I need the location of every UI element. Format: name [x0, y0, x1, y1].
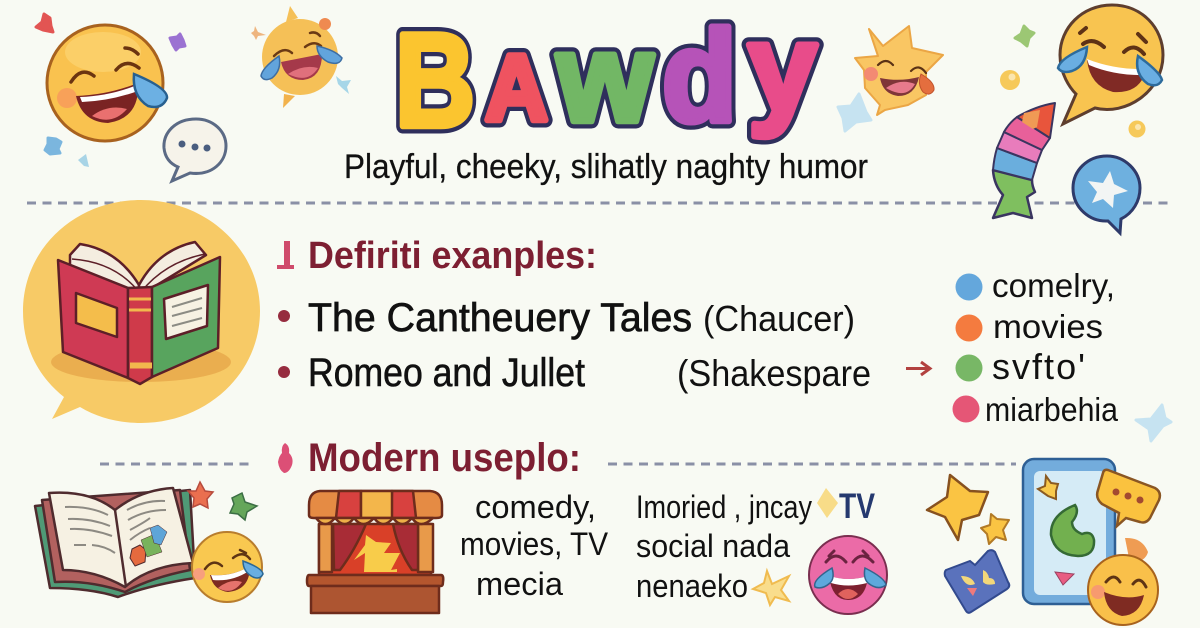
list: genres: miarbehia	[985, 391, 1119, 428]
text: comedy column	[460, 489, 609, 602]
icon: large laughing emoji	[47, 25, 167, 141]
icon: blue star bubble	[1073, 156, 1140, 233]
icon: orange chat bubble	[1097, 470, 1160, 526]
title: Bawdy: d	[662, 3, 737, 149]
text: Canterbury example: The Cantheuery Tales	[308, 296, 692, 340]
list: genres	[952, 267, 1119, 428]
icon: red and green book	[58, 242, 220, 384]
icon: pink section marker one	[277, 241, 294, 269]
subtitle: Playful, cheeky, slihatly naghty humor	[344, 148, 868, 186]
icon: red star	[36, 14, 53, 32]
icon: chat bubble	[164, 119, 226, 181]
icon: big gold star	[927, 475, 988, 540]
bullet: second example	[278, 366, 290, 378]
title: Bawdy	[395, 0, 817, 155]
bullet: first example	[278, 310, 290, 322]
icon: orange star	[188, 482, 213, 508]
list: genres: svfto'	[992, 346, 1085, 387]
text: comedy column: comedy,	[475, 489, 596, 525]
icon: gold diamond	[817, 488, 838, 518]
panel: definition book bubble	[23, 200, 260, 423]
title: Bawdy: y	[748, 0, 817, 138]
text: Romeo example: (Shakespare	[677, 353, 871, 394]
text: comedy column: movies, TV	[460, 526, 609, 562]
text: modern media column	[636, 489, 812, 604]
list: genres: comelry,	[992, 267, 1115, 304]
text: modern media column: Imoried , jncay	[636, 489, 812, 525]
title: Bawdy: w	[556, 9, 654, 148]
icon: pink section marker two	[278, 443, 293, 473]
title: Bawdy: A	[485, 35, 548, 140]
title: Bawdy: w	[556, 9, 654, 148]
text: modern media column: social nada	[636, 528, 790, 564]
text: Romeo example	[308, 351, 871, 395]
icon: small laughing emoji bubble	[261, 6, 342, 108]
icon: blue star	[45, 138, 61, 154]
heading: examples: Defiriti exanples:	[308, 235, 597, 277]
title: Bawdy: d	[662, 3, 737, 149]
title: Bawdy: y	[748, 0, 817, 138]
text: Romeo example: Romeo and Jullet	[308, 351, 585, 395]
title: Bawdy: B	[395, 7, 475, 155]
title: Bawdy: A	[485, 35, 548, 140]
icon: light blue star	[838, 94, 871, 131]
icon: book laughing emoji	[192, 532, 263, 602]
icon: phone	[1023, 459, 1115, 604]
icon: laughing speech bubble emoji	[1058, 5, 1163, 124]
icon: green star	[1015, 26, 1034, 46]
icon: blue sticker card	[945, 550, 1009, 613]
text: comedy column: mecia	[476, 566, 563, 602]
icon: rainbow rocket fish	[993, 103, 1055, 218]
icon: gold outline star	[753, 571, 789, 605]
icon: gold dots	[1000, 70, 1146, 138]
arrow	[906, 362, 930, 375]
icon: pink laughing emoji	[809, 536, 887, 614]
icon: open storybook	[35, 488, 195, 597]
heading: modern use: Modern useplo:	[308, 436, 581, 480]
title: Bawdy: B	[395, 7, 475, 155]
icon: theater stage	[307, 491, 443, 613]
icon: phone laughing emoji	[1088, 538, 1158, 625]
icon: purple star	[170, 34, 185, 50]
text: modern media column: nenaeko	[636, 568, 748, 604]
text: Canterbury example: (Chaucer)	[703, 298, 855, 339]
icon: small blue gem	[78, 154, 89, 167]
list: genres: movies	[993, 308, 1103, 345]
text: TV: TV	[839, 487, 876, 526]
icon: small gold star	[981, 514, 1009, 544]
icon: sun emoji	[855, 26, 943, 115]
icon: green star	[230, 493, 257, 520]
icon: blue sparkle	[336, 76, 351, 94]
icon: book shadow	[51, 342, 231, 382]
icon: pale blue star	[1136, 405, 1171, 441]
icon: tan sparkle	[251, 26, 266, 40]
